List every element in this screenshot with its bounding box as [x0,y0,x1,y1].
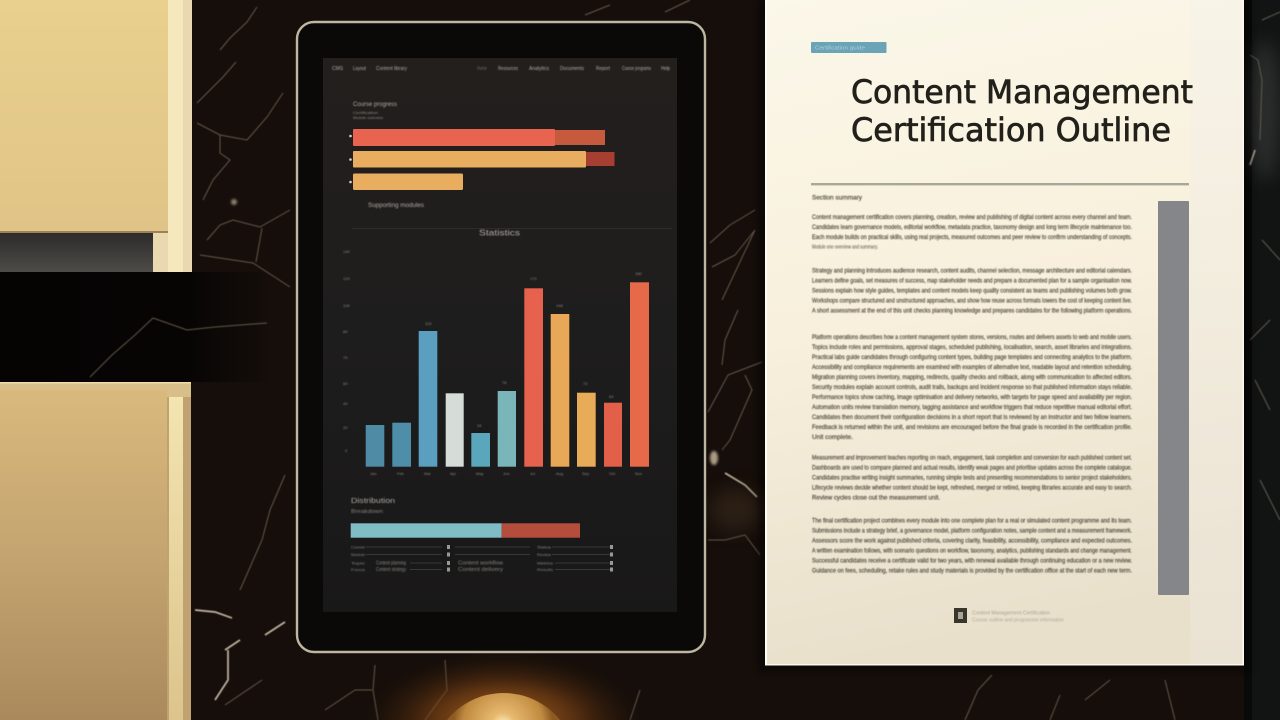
stacked bar section: Breakdown [351,509,383,515]
column chart: Aug [556,471,563,476]
paragraph 5 [812,518,1132,574]
column chart: Nov [635,471,642,476]
paragraph 4: Dashboards are used to compare planned and actual results, identify weak pages and prioritise updates across the complete catalogue. [812,464,1132,472]
panel: upper left tan block [0,0,192,272]
paragraph 4: Measurement and improvement teaches reporting on reach, engagement, task completion and conversion for each published content set. [812,454,1132,462]
horizontal bars heading [353,102,397,120]
tablet navigation: Layout [353,66,367,72]
tablet navigation: Report [596,66,611,72]
column chart: 34 [477,423,482,428]
stacked bar table: Course [351,544,366,550]
footer icon [954,608,967,623]
column chart: 78 [502,380,507,385]
footer text [972,610,1064,624]
horizontal bar chart: Supporting modules [368,203,424,209]
title: Content Management [851,73,1193,111]
horizontal bars heading: Course progress [353,102,397,108]
column chart: Jul [530,471,535,476]
column chart: 180 [635,271,642,276]
paragraph 5: Guidance on fees, scheduling, retake rules and study materials is provided by the certification office at the start of each new term. [812,568,1132,574]
paragraph 3 [812,334,1132,441]
column chart: 80 [343,329,348,334]
tablet navigation: Help [661,66,670,72]
tablet navigation: CMS [332,66,344,72]
paragraph 3: Performance topics show caching, image optimisation and delivery networks, with targets for page speed and availability per region. [812,394,1132,401]
tablet navigation [332,66,670,72]
paragraph 1: Candidates learn governance models, editorial workflow, metadata practice, taxonomy design and long term lifecycle maintenance too. [812,224,1132,231]
stacked bar table: Review [537,552,551,557]
column chart: Feb [397,471,405,476]
stacked bar table: Metrics [537,560,553,566]
paragraph 1: Each module builds on practical skills, using real projects, measured outcomes and peer review to confirm understanding of concepts. [812,234,1132,241]
column chart: 120 [343,276,350,281]
column chart: 100 [343,303,350,308]
stacked bar section [351,498,613,573]
paragraph 3: Platform operations describes how a content management system stores, versions, routes and delivers assets to web and mobile users. [812,334,1132,341]
paragraph 2: Sessions explain how style guides, templates and content models keep quality consistent as teams and publishing volumes both grow. [812,288,1132,294]
column chart: 172 [530,276,537,281]
paragraph 1 [812,214,1132,250]
paragraph 3: Security modules explain account controls, audit trails, backups and incident response so that published information stays reliable. [812,384,1132,391]
column chart: Mar [424,471,432,476]
column chart: Oct [609,471,616,476]
paragraph 3: Accessibility and compliance requirements are examined with examples of alternative text, readable layout and retention scheduling. [812,364,1132,371]
footer text: Course outline and programme information [972,618,1064,624]
lamp [447,693,560,720]
title: Certification Outline [851,111,1171,149]
title [851,73,1193,149]
paragraph 4: Candidates practise writing insight summaries, running simple tests and presenting recommendations to senior project stakeholders. [812,474,1132,482]
lamp glow [363,650,643,720]
stacked bar table: Content workflow [458,560,503,566]
paragraph 5: Submissions include a strategy brief, a governance model, platform configuration notes, sample content and a measurement framework. [812,528,1132,534]
footer [954,608,1064,624]
document tag: Certification guide [815,46,865,52]
column chart: 64 [609,394,614,399]
tablet screen [323,58,677,612]
stacked bar table [351,544,613,573]
document tag [811,42,886,53]
stacked bar table: Module [351,552,366,557]
column chart: Jan [370,471,376,476]
stacked bar table: Content strategy [376,567,406,573]
paragraph 3: Unit complete. [812,434,853,441]
panel: lower left tan block [0,382,191,720]
column chart: 70 [343,355,348,360]
paragraph 5: Successful candidates receive a certificate valid for two years, with renewal available through continuing education or a new review. [812,558,1132,564]
horizontal bar chart [349,129,614,209]
paragraph 3: Topics include roles and permissions, approval stages, scheduled publishing, localisation, search, asset libraries and integrations. [812,344,1132,351]
column chart [343,249,649,476]
horizontal bars heading: Certification [353,110,378,115]
paragraph 4 [812,454,1132,502]
paragraph 5: The final certification project combines every module into one complete plan for a real or simulated content programme and its team. [812,518,1132,524]
tablet navigation: Resources [498,66,518,72]
section label: Section summary [812,194,863,202]
paragraph 1: Module one overview and summary. [812,244,878,250]
paragraph 3: Practical labs guide candidates through configuring content types, building page templates and connecting analytics to the platform. [812,354,1132,361]
sidebar grey block [1158,201,1189,595]
paragraph 3: Automation units review translation memory, tagging assistance and workflow triggers that reduce repetitive manual editorial effort. [812,404,1132,411]
tablet navigation: Content library [376,66,407,72]
stacked bar table: Topic [351,560,365,566]
column chart: 60 [343,381,348,386]
stacked bar table: Content delivery [458,567,504,573]
column chart: Sep [582,471,590,476]
column chart: Apr [450,471,457,476]
tablet navigation: Analytics [529,66,549,72]
column chart: 20 [343,425,348,430]
paragraph 2: Strategy and planning introduces audience research, content audits, channel selection, message architecture and editorial calendars. [812,268,1132,274]
paragraph 2: Workshops compare structured and unstructured approaches, and show how reuse across formats lowers the cost of keeping content live. [812,298,1132,304]
horizontal bars heading: Module overview [353,115,383,120]
paragraph 1: Content management certification covers planning, creation, review and publishing of digital content across every channel and team. [812,214,1132,221]
tablet navigation: Course programs [622,66,651,72]
paragraph 3: Migration planning covers inventory, mapping, redirects, quality checks and rollback, along with communication to affected editors. [812,374,1132,381]
column chart: 40 [343,401,348,406]
stacked bar table: Status [537,544,551,550]
tablet [297,22,705,652]
column chart: 0 [345,448,348,453]
stacked bar table: Content planning [376,560,406,566]
footer text: Content Management Certification [972,610,1050,616]
paragraph 2 [812,268,1132,314]
paragraph 3: Feedback is returned within the unit, and revisions are encouraged before the final grade is recorded in the certification profile. [812,424,1132,431]
title rule [811,183,1189,185]
paragraph 3: Candidates then document their configuration decisions in a short report that is reviewed by an instructor and two fellow learners. [812,414,1132,421]
column chart: 72 [583,381,588,386]
column chart heading: Statistics [479,228,520,238]
paragraph 2: Learners define goals, set measures of success, map stakeholder needs and prepare a documented plan for a sample organisation now. [812,278,1132,284]
column chart: 115 [425,321,432,326]
document page [758,0,1252,672]
paragraph 2: A short assessment at the end of this unit checks planning knowledge and prepares candidates for the following platform operations. [812,308,1132,314]
stacked bar table: Results [537,567,553,572]
tablet navigation: Home [477,66,487,72]
stacked bar table: Focus [351,567,365,572]
tablet navigation: Documents [560,66,584,72]
column chart: 148 [556,303,563,308]
paragraph 5: Assessors score the work against published criteria, covering clarity, feasibility, accessibility, compliance and expected outcomes. [812,538,1132,544]
paragraph 4: Lifecycle reviews decide whether content should be kept, refreshed, merged or retired, keeping libraries accurate and easy to search. [812,484,1132,492]
stacked bar section: Distribution [351,498,395,505]
column chart: 140 [343,249,350,254]
column chart: May [476,471,484,476]
paragraph 4: Review cycles close out the measurement unit. [812,494,940,502]
paragraph 5: A written examination follows, with scenario questions on workflow, taxonomy, analytics, publishing standards and change management. [812,548,1132,554]
column chart: Jun [503,471,509,476]
